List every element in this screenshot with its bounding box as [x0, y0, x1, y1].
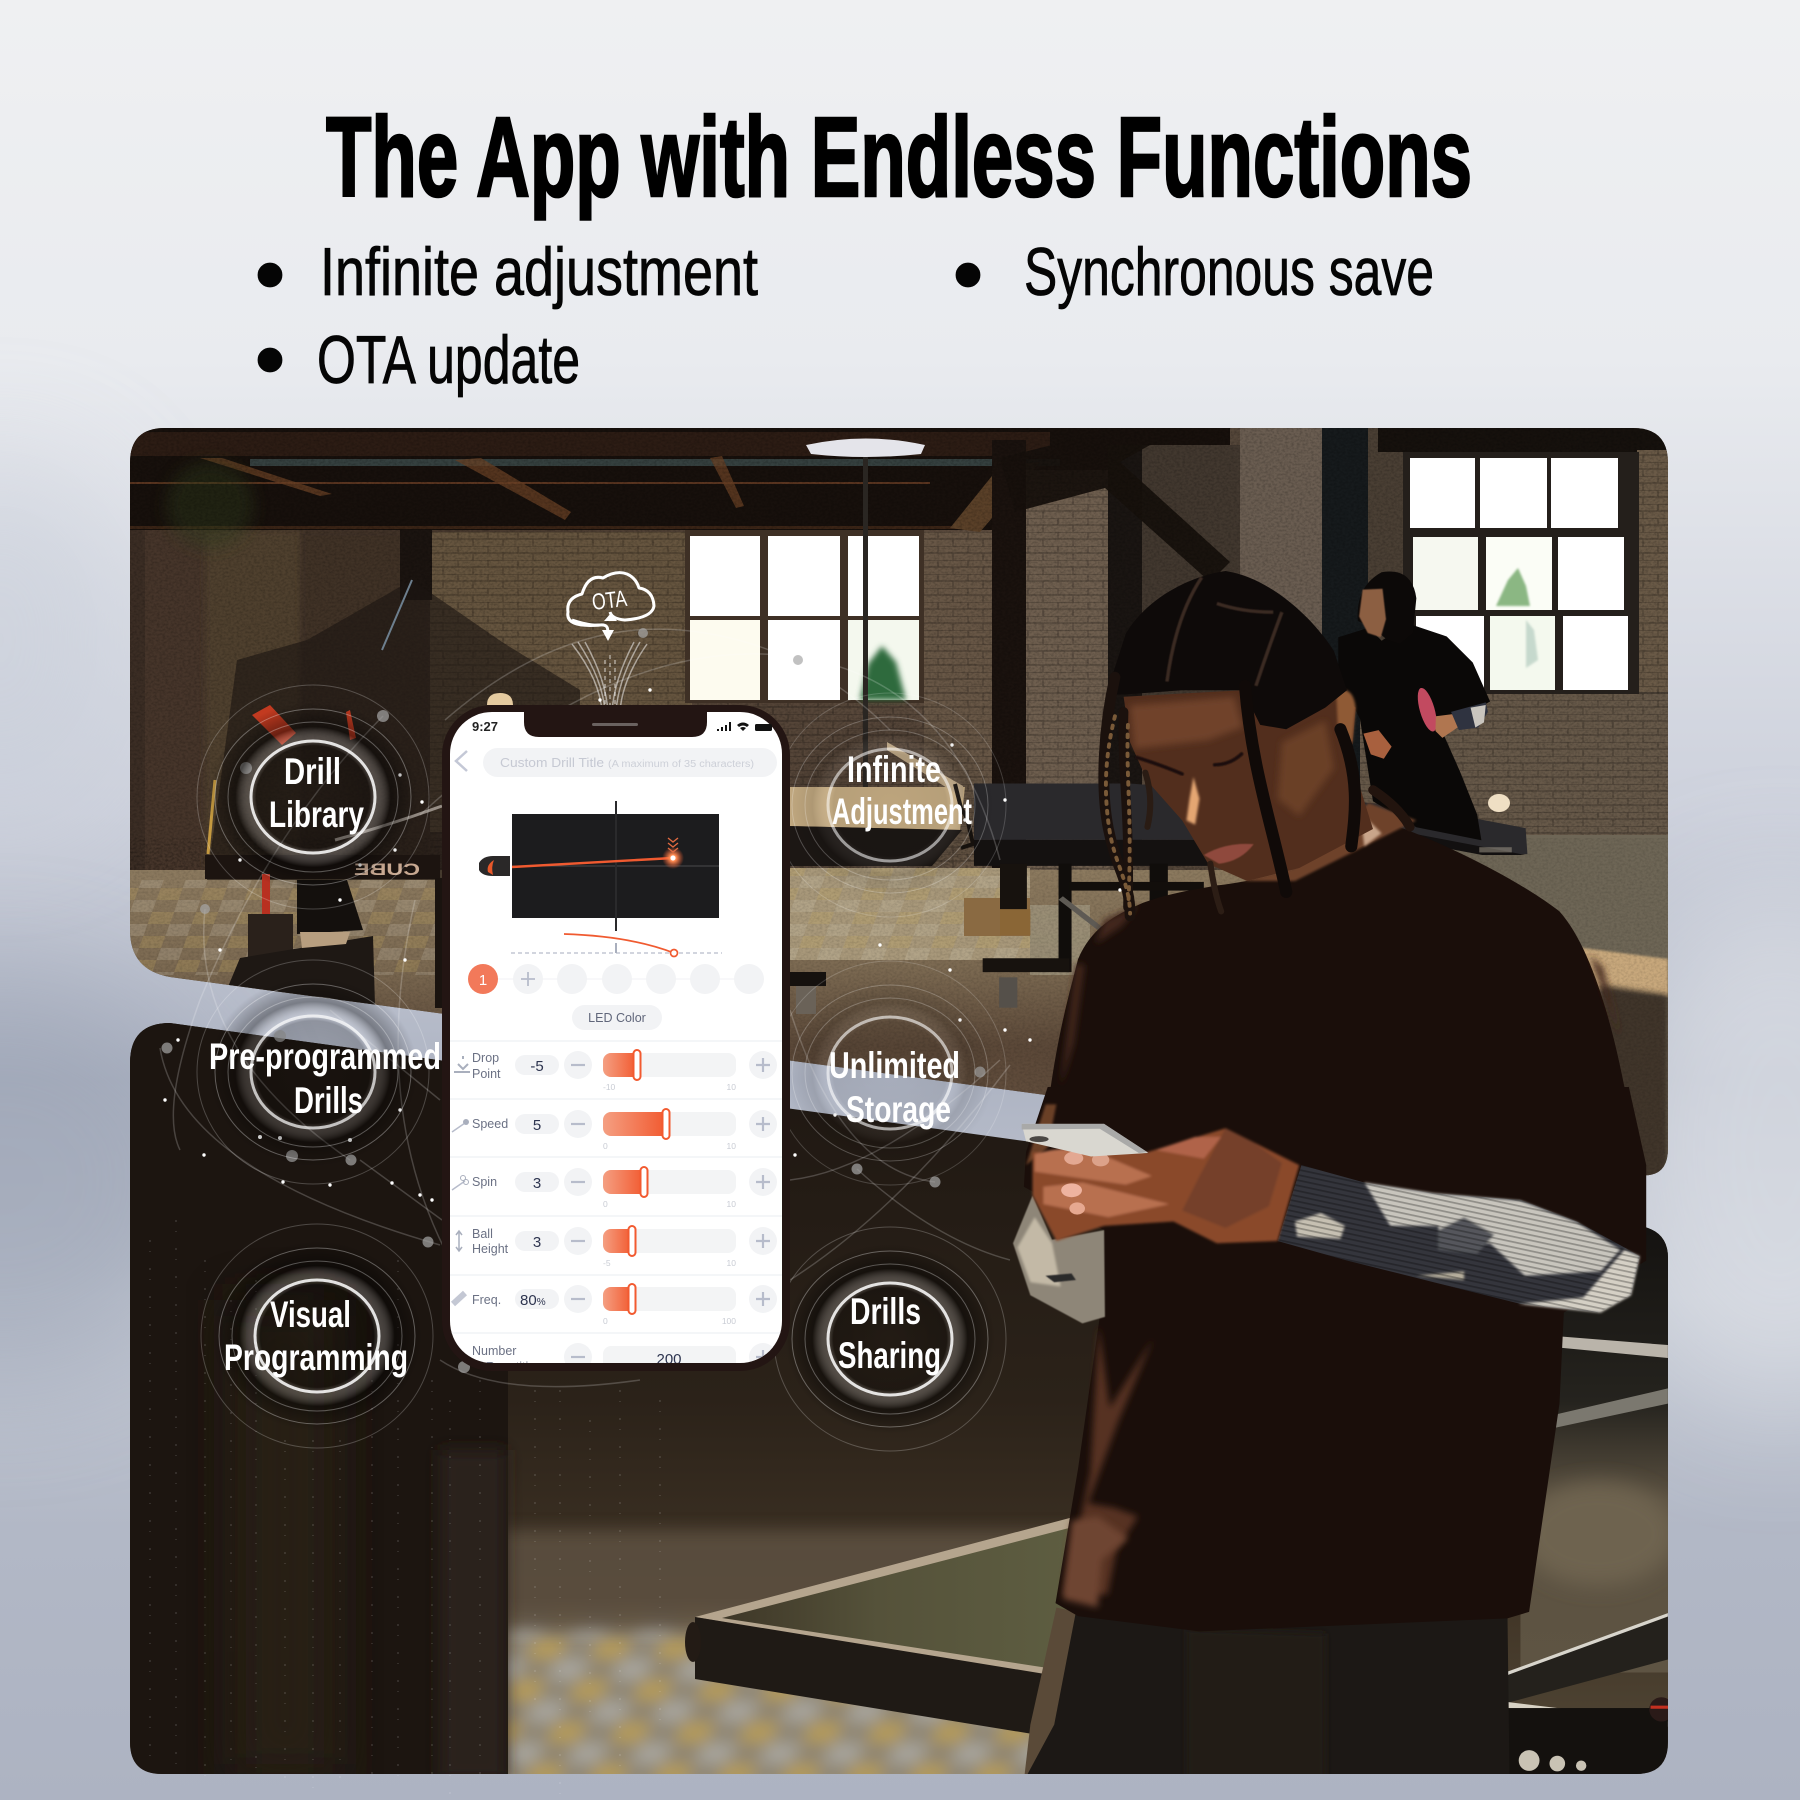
back table [974, 783, 1527, 1008]
ball machine with net [205, 580, 580, 1008]
table diagram [479, 801, 719, 931]
feature circle: unlimited storage [774, 961, 1006, 1185]
row: spin: 3 [533, 1175, 541, 1192]
row: frequency [453, 1284, 777, 1326]
person looking at phone [1013, 571, 1646, 1781]
mirrored CUBE logo: CUBE [354, 860, 420, 879]
foreground table corner [685, 1518, 1070, 1734]
drill step selector: 1 [479, 972, 487, 989]
row: spin: Spin [472, 1175, 497, 1189]
right window [1403, 452, 1639, 694]
row: speed: 5 [533, 1117, 541, 1134]
row: drop point: -5 [530, 1058, 544, 1075]
feature circle: infinite adjustment: Infinite [847, 749, 941, 790]
title field: Custom Drill Title [500, 755, 604, 770]
bullet: infinite adjustment: Infinite adjustment [320, 234, 758, 310]
feature bullet list [258, 234, 1434, 398]
feature circle: unlimited storage: Unlimited [829, 1045, 960, 1086]
bullet: synchronous save [956, 234, 1434, 310]
row: speed: 10 [727, 1141, 736, 1151]
trousers [1024, 1607, 1510, 1781]
title field [456, 748, 777, 777]
hair [1106, 571, 1347, 729]
flying ball [1488, 794, 1510, 812]
front-left table [787, 742, 1030, 1014]
trajectory side view [511, 934, 722, 956]
row: ball height [456, 1226, 777, 1268]
row: speed [452, 1109, 777, 1151]
hands [1033, 1128, 1299, 1243]
panel: lower photo with blurred court [130, 1020, 1694, 1800]
row: frequency: 100 [722, 1316, 736, 1326]
ceiling beams [130, 428, 1230, 549]
bullet: synchronous save: Synchronous save [1024, 234, 1434, 310]
row: spin [452, 1167, 777, 1209]
feature circle: visual programming: Programming [224, 1337, 408, 1378]
title field: (A maximum of 35 characters) [608, 759, 754, 770]
feature circle: pre-programmed drills [197, 960, 441, 1184]
status bar [472, 719, 772, 734]
neck [1243, 803, 1416, 881]
feature circle: pre-programmed drills: Pre-programmed [209, 1036, 441, 1077]
feature circle: unlimited storage: Storage [846, 1089, 951, 1130]
LED colour button: LED Color [588, 1011, 646, 1025]
feature circle: visual programming [201, 1224, 433, 1448]
row: ball height: 10 [727, 1258, 736, 1268]
row: speed: Speed [472, 1117, 508, 1131]
row: speed: 0 [603, 1141, 608, 1151]
row: number of repetitions [472, 1343, 777, 1374]
feature circle: drills sharing [774, 1227, 1006, 1451]
floor [130, 870, 1247, 1095]
row: drop point [454, 1050, 777, 1092]
row: spin: 10 [727, 1199, 736, 1209]
feature circle: infinite adjustment [774, 693, 1006, 917]
ceiling lamp and pole [806, 438, 925, 792]
hanging lamp [487, 693, 513, 705]
braids [1104, 677, 1410, 916]
right-side court lines [1508, 1228, 1668, 1774]
handheld phone [1022, 1124, 1148, 1156]
row: drop point: Point [472, 1067, 501, 1081]
phone notch [524, 705, 707, 737]
row: frequency: Freq. [472, 1293, 501, 1307]
network arcs and nodes [160, 628, 1122, 1387]
row: ball height: Height [472, 1242, 509, 1256]
OTA cloud update icon [568, 573, 654, 712]
wall left and centre [130, 525, 1000, 890]
phone screen [450, 712, 782, 1374]
LED colour button [572, 1005, 662, 1030]
row: ball height: -5 [603, 1258, 611, 1268]
feature circle: drill library [197, 685, 429, 909]
row: ball height: Ball [472, 1227, 493, 1241]
row: frequency: 80% [520, 1292, 546, 1309]
row: number of repetitions: 200 [656, 1351, 682, 1368]
status bar: 9:27 [472, 719, 498, 734]
row: drop point: 10 [727, 1082, 736, 1092]
bullet: OTA update: OTA update [317, 322, 580, 398]
app phone mockup [442, 705, 790, 1374]
row: drop point: Drop [472, 1051, 499, 1065]
feature circle: visual programming: Visual [270, 1294, 351, 1335]
feature circle: drill library: Drill [284, 751, 341, 792]
centre window [685, 530, 924, 703]
drill step selector [468, 964, 764, 994]
cuff left sleeve [1013, 1195, 1105, 1323]
OTA cloud update icon: OTA [590, 585, 629, 615]
long sleeve right arm [1278, 1165, 1640, 1313]
shirt upper [1048, 827, 1629, 1111]
row: frequency: 0 [603, 1316, 608, 1326]
binary data rain [150, 1220, 660, 1800]
row: drop point: -10 [603, 1082, 616, 1092]
dark pillars and right wall [992, 428, 1668, 910]
row: number of repetitions: of Repetition [472, 1360, 542, 1374]
row: spin: 0 [603, 1199, 608, 1209]
feature circle: drills sharing: Drills [850, 1291, 921, 1332]
feature circle: pre-programmed drills: Drills [294, 1080, 363, 1121]
bullet: OTA update [258, 322, 580, 398]
row: number of repetitions: Number [472, 1344, 516, 1358]
ball machine icon [479, 856, 510, 876]
upload data streams [572, 642, 647, 712]
face [1124, 689, 1373, 881]
background player [1338, 572, 1490, 840]
panel: upper photo of the hall [130, 428, 1668, 1195]
feature circle: drill library: Library [269, 794, 364, 835]
row: ball height: 3 [533, 1234, 541, 1251]
feature circle: drills sharing: Sharing [838, 1335, 941, 1376]
feature circle: infinite adjustment: Adjustment [832, 791, 972, 832]
shirt lower [1013, 1087, 1646, 1631]
